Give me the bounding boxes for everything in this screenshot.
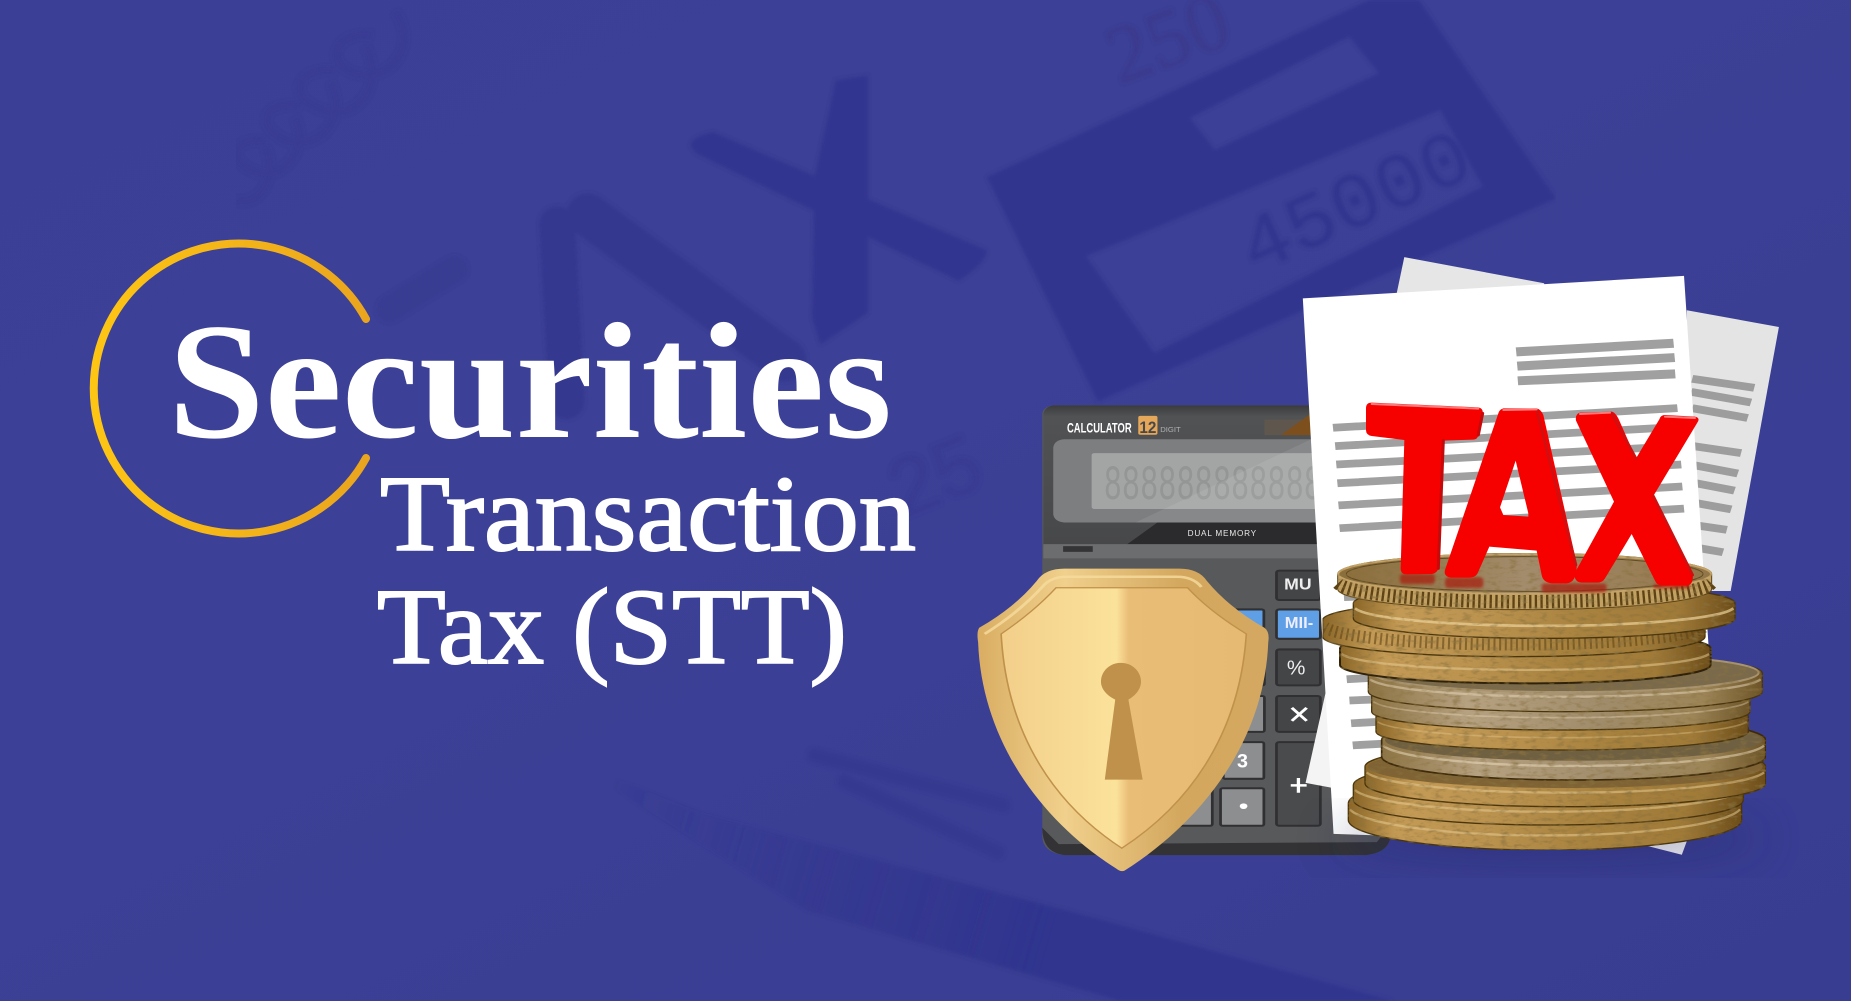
- keyhole: [1101, 663, 1143, 780]
- calculator header: [1043, 405, 1322, 546]
- display glare: [1136, 439, 1322, 522]
- shield inner: [1001, 588, 1246, 848]
- dark band: [1125, 522, 1322, 546]
- MU key: [1276, 571, 1320, 600]
- paper: back right sheet: [1687, 310, 1779, 591]
- TAX red letters: [1366, 403, 1699, 593]
- partial grey key: [1234, 696, 1264, 732]
- faded letter X: [691, 76, 987, 345]
- title: [168, 289, 916, 687]
- plus key: [1276, 742, 1320, 826]
- notch: [1063, 546, 1093, 552]
- percent key: %: [1287, 657, 1305, 680]
- faded calculator: [987, 0, 1556, 401]
- calculator body: [1042, 405, 1391, 855]
- digit label: DIGIT: [1160, 425, 1181, 434]
- LCD: [1092, 453, 1322, 509]
- letter X: [1575, 412, 1699, 586]
- coin 11: [1348, 773, 1742, 850]
- partial lower key: [1179, 788, 1212, 826]
- shield outer: [977, 569, 1269, 871]
- percent key: [1276, 649, 1320, 685]
- display bottom edge: [1043, 544, 1322, 558]
- letter T: [1366, 403, 1483, 574]
- top coin: [1338, 553, 1712, 610]
- calculator: [1042, 405, 1391, 855]
- memory minus key: MII-: [1285, 615, 1313, 632]
- partial dark key: [1234, 649, 1264, 685]
- digit badge: 12: [1139, 419, 1156, 437]
- MU key: MU: [1284, 576, 1312, 593]
- calculator brand: CALCULATOR: [1067, 421, 1132, 436]
- coin 5: [1368, 653, 1762, 712]
- body text lines: [1333, 408, 1684, 528]
- paper: main sheet: [1303, 276, 1728, 855]
- paper: back upper sheet: [1393, 257, 1544, 309]
- illustration: calculator, papers, coins, shield: [977, 257, 1779, 871]
- decimal key: [1221, 788, 1264, 826]
- faded figures on paper: 25: [875, 415, 995, 536]
- faded letter A: [390, 215, 785, 401]
- multiply key: [1276, 696, 1320, 732]
- coin 2: [1353, 583, 1735, 638]
- calculator and papers: [1042, 257, 1779, 855]
- coin shadow: [1333, 820, 1763, 856]
- letter A: [1445, 408, 1577, 583]
- coin stack: [1323, 553, 1766, 850]
- coin 3: [1323, 600, 1705, 657]
- title line: Securities: Securities: [168, 289, 892, 473]
- low text lines: [1344, 596, 1382, 745]
- coin 10: [1353, 760, 1743, 825]
- back sheet lines: [1691, 379, 1754, 552]
- paper: lower curl: [1306, 689, 1338, 789]
- coin 6: [1372, 678, 1750, 730]
- LCD digits: 888888888888: [1104, 459, 1322, 514]
- memory minus key: [1276, 609, 1320, 639]
- faded notebook spiral: [236, 12, 404, 201]
- coin 9: [1365, 743, 1766, 807]
- decorative ring: [94, 243, 366, 534]
- key 3: 3: [1237, 750, 1248, 772]
- partial blue key: [1234, 609, 1264, 638]
- memory label: DUAL MEMORY: [1188, 529, 1257, 538]
- buttons: [1179, 571, 1320, 826]
- title line: Tax (STT): Tax (STT): [377, 568, 847, 687]
- letter reflections: [1400, 574, 1690, 593]
- faded diagonal band: [561, 756, 1393, 1001]
- shield rim highlight: [985, 577, 1201, 634]
- shield: [977, 569, 1269, 871]
- solar cell: [1264, 413, 1311, 435]
- key 3: [1223, 742, 1264, 779]
- title line: Transaction: Transaction: [380, 455, 916, 574]
- calculator base: [1042, 828, 1391, 855]
- faded pen: [815, 756, 1003, 852]
- faded background photo: tax letters, calculator and pen: [236, 0, 1556, 1001]
- display surround: [1053, 439, 1322, 522]
- coin 8: [1382, 717, 1766, 780]
- coin 4: [1340, 630, 1711, 683]
- top text lines: [1516, 343, 1675, 381]
- faded calculator readout: 45000: [1227, 116, 1486, 295]
- coin 7: [1376, 698, 1748, 750]
